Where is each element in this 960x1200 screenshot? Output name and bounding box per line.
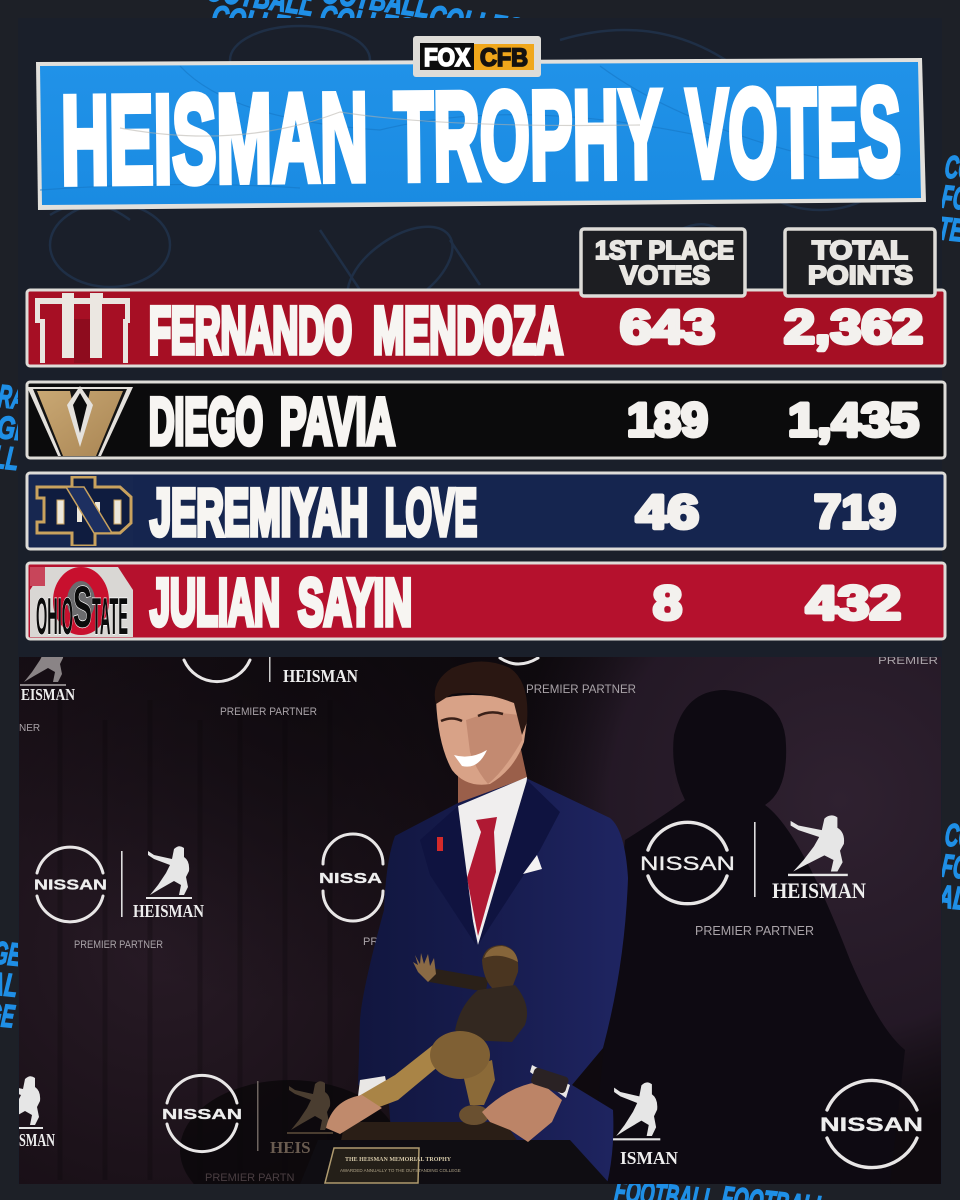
logo: Ohio State (30, 567, 133, 637)
row: Jeremiyah Love (27, 473, 945, 549)
row: Julian Sayin: TATE (92, 588, 128, 646)
hands (326, 1067, 570, 1142)
title banner (36, 58, 926, 210)
first place votes: 46 (636, 485, 699, 538)
name: JEREMIYAH (150, 475, 368, 549)
logo: Ohio State: OHIO (36, 588, 73, 646)
logo: Heisman, bottom centre right: ISMAN (620, 1148, 678, 1168)
logo: Vanderbilt (27, 386, 133, 456)
FOX CFB logo: CFB (480, 44, 528, 72)
blue repeating football text: right lower (936, 816, 960, 918)
first place votes: 8 (653, 576, 682, 629)
photo: Mendoza with the Heisman Trophy (0, 633, 941, 1200)
total points: 2,362 (784, 300, 923, 353)
trophy figure (352, 945, 527, 1125)
row: Julian Sayin (27, 563, 945, 646)
logo: Nissan and Heisman, mid left: HEISMAN (133, 901, 204, 921)
shadow of player on backdrop (618, 690, 905, 1086)
logo: Nissan, centre behind player (319, 834, 383, 948)
logo: Heisman, bottom left edge (19, 1076, 55, 1146)
backdrop (19, 657, 941, 1200)
neck (458, 750, 528, 803)
suit jacket (358, 778, 628, 1184)
logo: Nissan and Heisman, right (640, 815, 866, 938)
column header: total points (785, 229, 935, 296)
logo: Heisman, bottom centre right (612, 1082, 678, 1168)
column header: 1st place votes: 1ST PLACE (595, 235, 734, 265)
name: JULIAN (150, 565, 280, 639)
logo: Notre Dame (30, 476, 133, 546)
facial shadow, brows and smile (441, 712, 522, 784)
row: Fernando Mendoza (27, 290, 945, 367)
logo: Nissan and Heisman, right: NISSAN (640, 854, 735, 875)
lapels (420, 780, 560, 945)
first place votes: 643 (620, 300, 715, 353)
title text: TROPHY (393, 65, 663, 207)
column header: total points: TOTAL (812, 235, 908, 265)
logo: Nissan and Heisman, bottom left: HEIS (270, 1138, 311, 1157)
total points: 1,435 (788, 393, 919, 446)
logo: Nissan and Heisman, mid left (34, 846, 204, 951)
logo: Nissan and Heisman, mid left: NISSAN (34, 876, 107, 894)
name: LOVE (385, 475, 477, 549)
trophy base: THE HEISMAN MEMORIAL TROPHY (345, 1157, 452, 1163)
logo: Ohio State: S (73, 575, 92, 640)
blue repeating football text: right upper (937, 148, 960, 250)
logos: cropped top row of backdrop (20, 657, 938, 731)
blue repeating football text: left upper (0, 376, 28, 477)
logos: cropped top row of backdrop: EISMAN (21, 685, 76, 704)
trophy base (300, 1122, 610, 1184)
column header: 1st place votes: VOTES (620, 260, 710, 290)
logo: Nissan and Heisman, bottom left: PREMIER PARTN (205, 1172, 294, 1184)
total points: 719 (814, 485, 896, 538)
logo: Nissan, bottom right: NISSAN (820, 1115, 923, 1136)
trophy plaque (325, 1148, 419, 1183)
logos: cropped top row of backdrop: NER (19, 723, 40, 734)
logos: cropped top row of backdrop: PREMIER PARTNER (220, 706, 317, 718)
FOX CFB logo: FOX (424, 44, 470, 72)
title text (60, 63, 902, 210)
blue repeating football text: left lower (0, 933, 24, 1035)
shirt (458, 777, 527, 945)
first place votes: 189 (627, 393, 708, 446)
name: MENDOZA (373, 293, 563, 367)
shirt cuffs (358, 1065, 570, 1098)
total points: 432 (806, 576, 901, 629)
FOX CFB logo (413, 36, 541, 77)
logo: Indiana (30, 293, 130, 363)
logo: Nissan and Heisman, bottom left: NISSAN (162, 1106, 242, 1123)
blue repeating football text: top edge: COLLEGE (427, 0, 542, 50)
name: SAYIN (298, 565, 412, 639)
lapel pin (437, 837, 443, 851)
pocket square (523, 855, 542, 874)
logo: Nissan and Heisman, right: PREMIER PARTNER (695, 923, 814, 938)
logo: Nissan and Heisman, right: HEISMAN (772, 878, 866, 903)
name: DIEGO (149, 384, 263, 458)
trophy base: AWARDED ANNUALLY TO THE OUTSTANDING COLLEGE (340, 1168, 461, 1173)
logos: cropped top row of backdrop: PREMIER (878, 655, 938, 667)
column header: 1st place votes (581, 229, 745, 296)
name: FERNANDO (149, 293, 352, 367)
logo: Nissan, centre behind player: PR (363, 936, 378, 948)
logos: cropped top row of backdrop: HEISMAN (283, 666, 358, 686)
logo: Nissan and Heisman, mid left: PREMIER PARTNER (74, 939, 163, 951)
logo: Nissan, centre behind player: NISSA (319, 870, 382, 887)
hair (435, 662, 527, 735)
logo: Nissan, bottom right (820, 1080, 923, 1168)
logo: Nissan and Heisman, bottom left (162, 1075, 333, 1184)
name: PAVIA (280, 384, 395, 458)
face (436, 695, 527, 785)
tie (467, 817, 497, 936)
player (358, 662, 628, 1184)
logos: cropped top row of backdrop: PREMIER PARTNER (526, 682, 636, 696)
blue repeating football text: top edge (187, 0, 543, 82)
logo: Heisman, bottom left edge: SMAN (19, 1130, 55, 1150)
column header: total points: POINTS (808, 260, 913, 290)
title text: HEISMAN (60, 68, 369, 210)
row: Diego Pavia (27, 382, 945, 458)
